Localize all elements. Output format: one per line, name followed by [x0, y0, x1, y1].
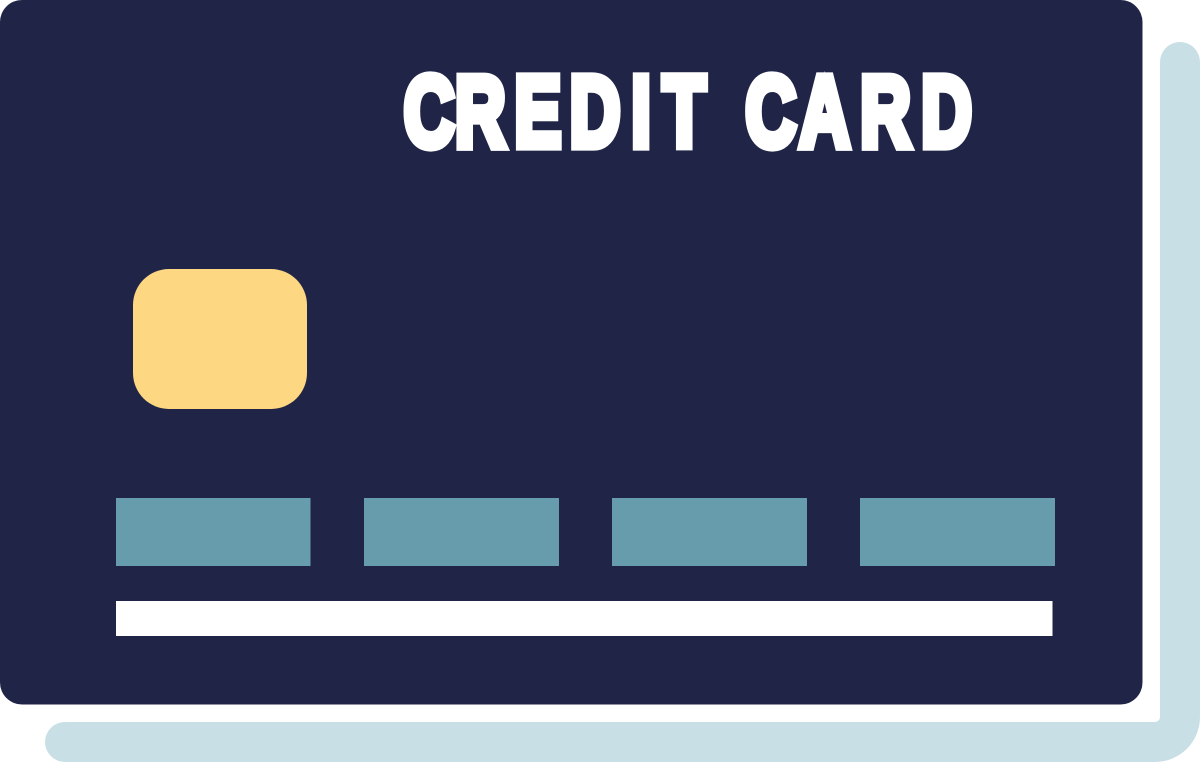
title: CREDIT CARD: [404, 57, 972, 168]
card number blocks: [116, 498, 1055, 566]
icon: chip: [133, 269, 307, 409]
cardholder strip: [116, 601, 1052, 636]
